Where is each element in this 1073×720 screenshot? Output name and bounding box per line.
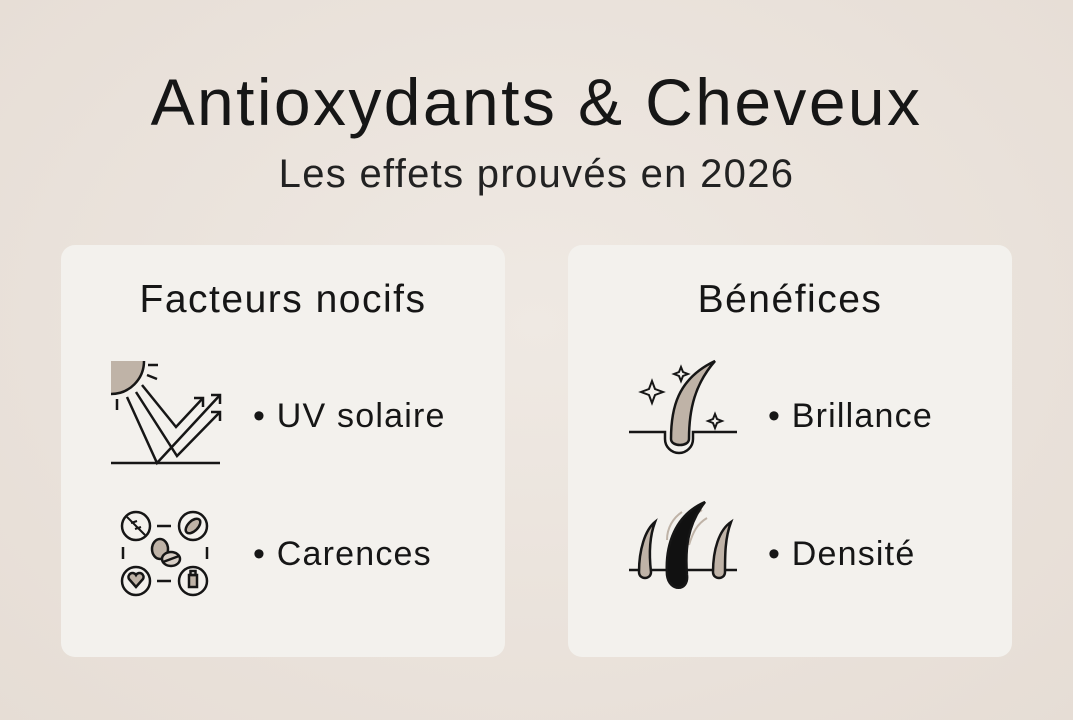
panel: bénéfices (568, 245, 1012, 657)
icon: sun UV (111, 361, 222, 466)
icon: shiny hair (629, 360, 737, 454)
item: UV solaire: • UV solaire (253, 397, 446, 435)
item: Carences: • Carences (253, 535, 432, 573)
subtitle: Les effets prouvés en 2026 (279, 152, 794, 196)
icon: nutrients (120, 510, 208, 596)
icon: density (629, 500, 737, 589)
panel: facteurs nocifs (61, 245, 505, 657)
heading: bénéfices: Bénéfices (698, 278, 882, 321)
title: Antioxydants & Cheveux (151, 65, 922, 139)
item: Brillance: • Brillance (768, 397, 933, 435)
heading: facteurs nocifs: Facteurs nocifs (140, 278, 426, 321)
item: Densité: • Densité (768, 535, 915, 573)
